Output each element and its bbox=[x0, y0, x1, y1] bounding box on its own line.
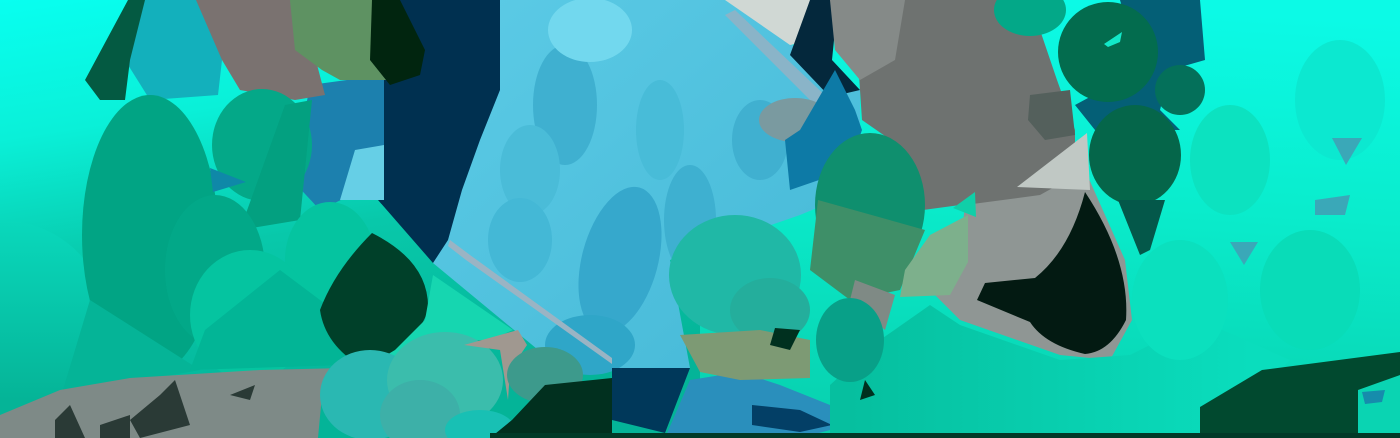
shape: salmon sliver bbox=[464, 330, 527, 400]
balloon: pale olive bbox=[900, 215, 968, 297]
balloon: dark teal shade bbox=[1075, 0, 1205, 130]
shape: black shadow bbox=[370, 0, 425, 85]
panel: right balloon cluster detail bbox=[1132, 40, 1385, 360]
panel: teal balloons bottom centre bbox=[320, 332, 515, 438]
shape: grey floor bbox=[0, 368, 345, 438]
background: right teal field bbox=[700, 0, 1400, 438]
background: left teal field bbox=[0, 0, 700, 438]
balloon: dark green upper bbox=[1058, 2, 1158, 102]
shape: mauve wedge bbox=[850, 280, 895, 330]
balloon: dark green mid bbox=[1155, 65, 1205, 115]
shape: dark bottom edge bbox=[490, 433, 1400, 438]
shape: black hair bbox=[977, 192, 1126, 354]
shape: dark green bottom centre bbox=[490, 378, 612, 438]
balloon: teal corner bbox=[1358, 375, 1400, 438]
detail: black flecks near bottom bbox=[770, 328, 875, 400]
panel: teal balloons bottom right of figure bbox=[816, 298, 1290, 438]
balloon: green shade bbox=[810, 200, 925, 300]
balloon: teal top bbox=[994, 0, 1066, 36]
panel: grey figure upper bbox=[830, 0, 1075, 215]
icon: blue fleck bbox=[1362, 390, 1385, 404]
shape: dark collar top bbox=[790, 0, 860, 97]
icon: teal triangle bbox=[953, 192, 976, 217]
panel: green balloons left bbox=[0, 89, 312, 438]
shape: blue bottom patch bbox=[665, 372, 830, 438]
icon: small mauve triangles bbox=[1230, 138, 1362, 265]
balloon: grey green bbox=[507, 347, 583, 403]
balloon: dark green lower bbox=[1089, 105, 1181, 205]
shape: white highlight beside figure bbox=[1017, 133, 1090, 190]
panel: grey figure lower bbox=[930, 170, 1132, 360]
shape: bright green wedge bbox=[365, 275, 513, 370]
panel: teal balloons centre bbox=[669, 215, 810, 342]
shape: white highlight top bbox=[725, 0, 830, 45]
icon: glint on balloon bbox=[1104, 32, 1122, 47]
balloon: green centre bbox=[815, 133, 925, 277]
shape: olive balloon bbox=[290, 0, 400, 80]
shape: blue balloon bbox=[785, 70, 862, 190]
shape: olive brown patch bbox=[680, 330, 810, 380]
panel: teal patterned balloon bbox=[85, 0, 222, 100]
panel: bright teal balloon bbox=[190, 202, 375, 380]
detail: dark textured patch by figure bbox=[1028, 90, 1075, 140]
shape: navy band bbox=[372, 0, 500, 263]
detail: dark flecks on floor bbox=[55, 380, 255, 438]
shape: blue strip bbox=[292, 75, 384, 210]
balloon: dark green tail bbox=[1118, 200, 1165, 255]
balloon: dark green bbox=[320, 233, 428, 367]
detail: textured grey patch bbox=[830, 0, 905, 80]
panel: light blue balloon wall bbox=[433, 0, 860, 375]
shape: pale reflection bbox=[340, 145, 384, 200]
shape: navy bottom centre bbox=[612, 368, 690, 433]
icon: small blue triangle bbox=[210, 168, 246, 192]
shape: brown wedge bbox=[196, 0, 325, 100]
detail: navy fleck bbox=[752, 405, 832, 432]
shape: dark green shadow bottom right bbox=[1200, 352, 1400, 438]
